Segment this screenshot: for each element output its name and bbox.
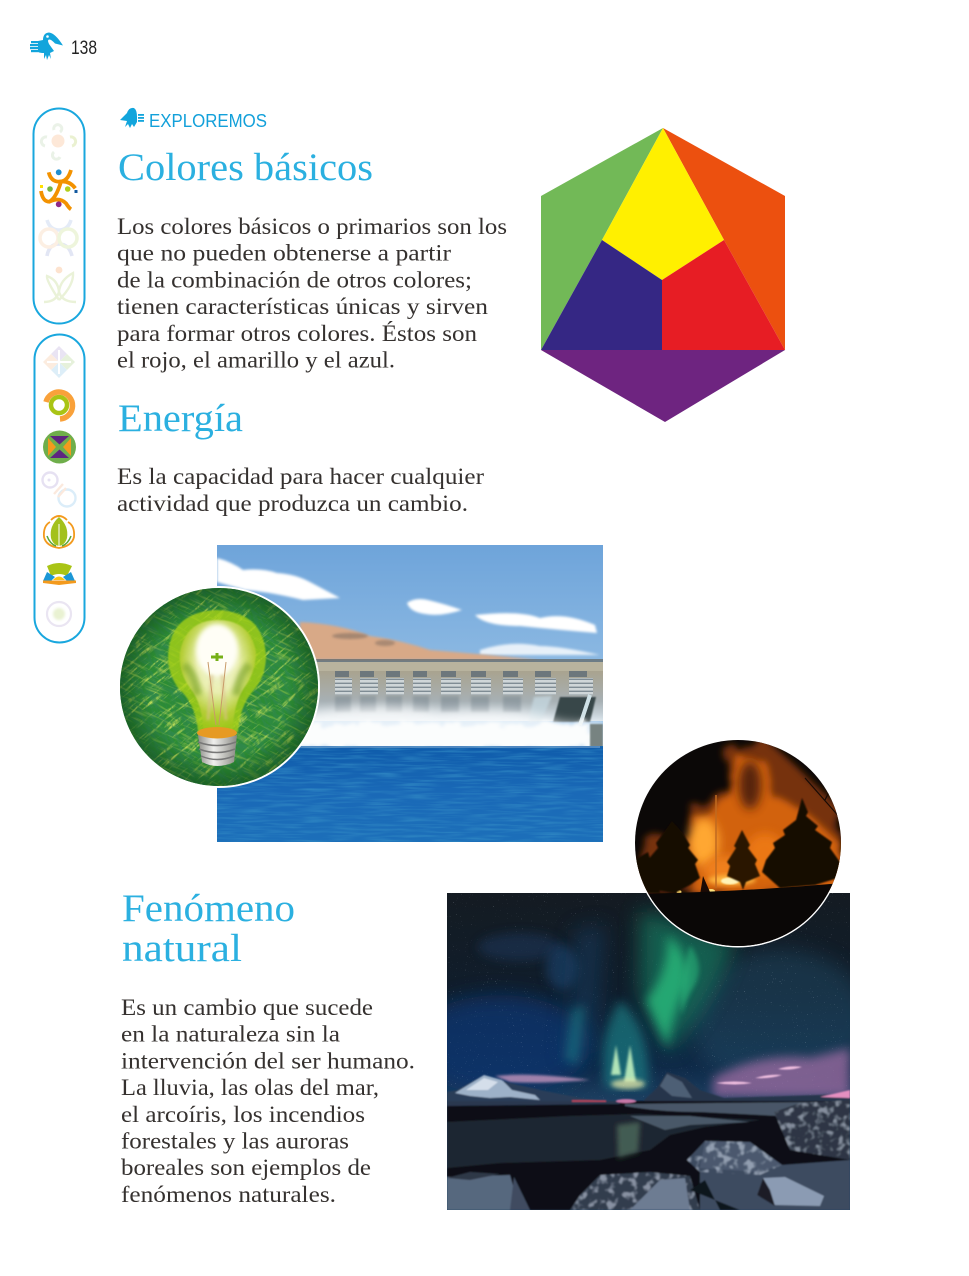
- dark shore: [447, 1101, 850, 1210]
- page number header: [30, 32, 97, 60]
- icon: faded plant: [44, 267, 76, 302]
- page: [30, 32, 850, 1210]
- panel: lower sidebar of icons: [34, 334, 84, 642]
- icon: faded diamond: [43, 346, 75, 378]
- red segment: [662, 240, 785, 350]
- text block: energía: [117, 464, 484, 517]
- icon: bird glyph: [30, 32, 63, 60]
- label text: EXPLOREMOS: [149, 111, 267, 131]
- text block: energía: Es la capacidad para hacer cualquier: [117, 464, 484, 490]
- sea: [217, 746, 603, 842]
- panel: upper sidebar of icons: [34, 108, 84, 324]
- lagoon: [447, 1114, 760, 1168]
- bulb base: [197, 727, 237, 766]
- text block: fenómeno natural: fenómenos naturales.: [121, 1182, 336, 1208]
- text block: energía: actividad que produzca un cambio.: [117, 491, 468, 517]
- text block: colores básicos: el rojo, el amarillo y el azul.: [117, 348, 395, 374]
- heading: fenómeno natural: [122, 887, 295, 970]
- icon: green and blue fan: [43, 563, 76, 585]
- text block: fenómeno natural: el arcoíris, los incendios: [121, 1102, 365, 1128]
- mountains: [447, 1078, 595, 1102]
- flames and smoke: [634, 742, 842, 893]
- text block: fenómeno natural: Es un cambio que sucede: [121, 995, 373, 1021]
- pink glow: [713, 1048, 850, 1097]
- heading: fenómeno natural: Fenómeno: [122, 887, 295, 930]
- text block: colores básicos: Los colores básicos o primarios son los: [117, 214, 507, 240]
- tree silhouettes: [634, 798, 840, 893]
- icon: faded rings: [42, 472, 76, 506]
- blue segment: [541, 240, 662, 350]
- photo: aurora borealis: [447, 893, 850, 1210]
- photo: forest fire: [634, 738, 842, 948]
- landscape softened: [447, 1072, 850, 1210]
- heading: fenómeno natural: natural: [122, 927, 242, 970]
- text block: colores básicos: para formar otros colores. Éstos son: [117, 321, 477, 347]
- text block: fenómeno natural: [121, 995, 415, 1208]
- purple segment: [541, 350, 785, 422]
- icon: leaf in orange lotus: [44, 516, 74, 548]
- heading: energía: Energía: [118, 397, 243, 440]
- section label: exploremos: [120, 108, 267, 131]
- aurora glow: [640, 910, 735, 1052]
- gates: [300, 671, 603, 721]
- chart: colour hexagon: [541, 128, 785, 422]
- heading: colores básicos: Colores básicos: [118, 146, 373, 189]
- rocks: [774, 1100, 850, 1160]
- icon: faded circle: [47, 602, 71, 626]
- spray: [300, 707, 603, 748]
- text block: colores básicos: de la combinación de otros colores;: [117, 267, 472, 293]
- text block: fenómeno natural: en la naturaleza sin la: [121, 1022, 341, 1048]
- icon: faded swirls: [41, 125, 76, 159]
- photo: hydroelectric dam: [217, 545, 603, 842]
- photo: light bulb on grass: [120, 586, 320, 788]
- yellow segment: [602, 128, 724, 280]
- text block: colores básicos: tienen características únicas y sirven: [117, 294, 488, 320]
- text block: fenómeno natural: La lluvia, las olas del mar,: [121, 1075, 379, 1101]
- bulb glass: [168, 610, 266, 732]
- icon: orange triskel with dots: [40, 169, 78, 209]
- page number: 138: [71, 38, 97, 59]
- text block: colores básicos: [117, 214, 507, 374]
- text block: colores básicos: que no pueden obtenerse a partir: [117, 241, 451, 267]
- green segment: [541, 128, 663, 350]
- text block: fenómeno natural: boreales son ejemplos de: [121, 1155, 371, 1181]
- hill: [300, 622, 540, 660]
- icon: bird glyph small: [120, 108, 144, 128]
- orange segment: [663, 128, 785, 350]
- icon: faded crossing arcs: [40, 220, 77, 256]
- icon: orange ring with green centre: [46, 392, 73, 419]
- icon: green circle with purple and orange triangles: [43, 430, 76, 464]
- text block: fenómeno natural: forestales y las auroras: [121, 1128, 349, 1154]
- text block: fenómeno natural: intervención del ser humano.: [121, 1048, 415, 1074]
